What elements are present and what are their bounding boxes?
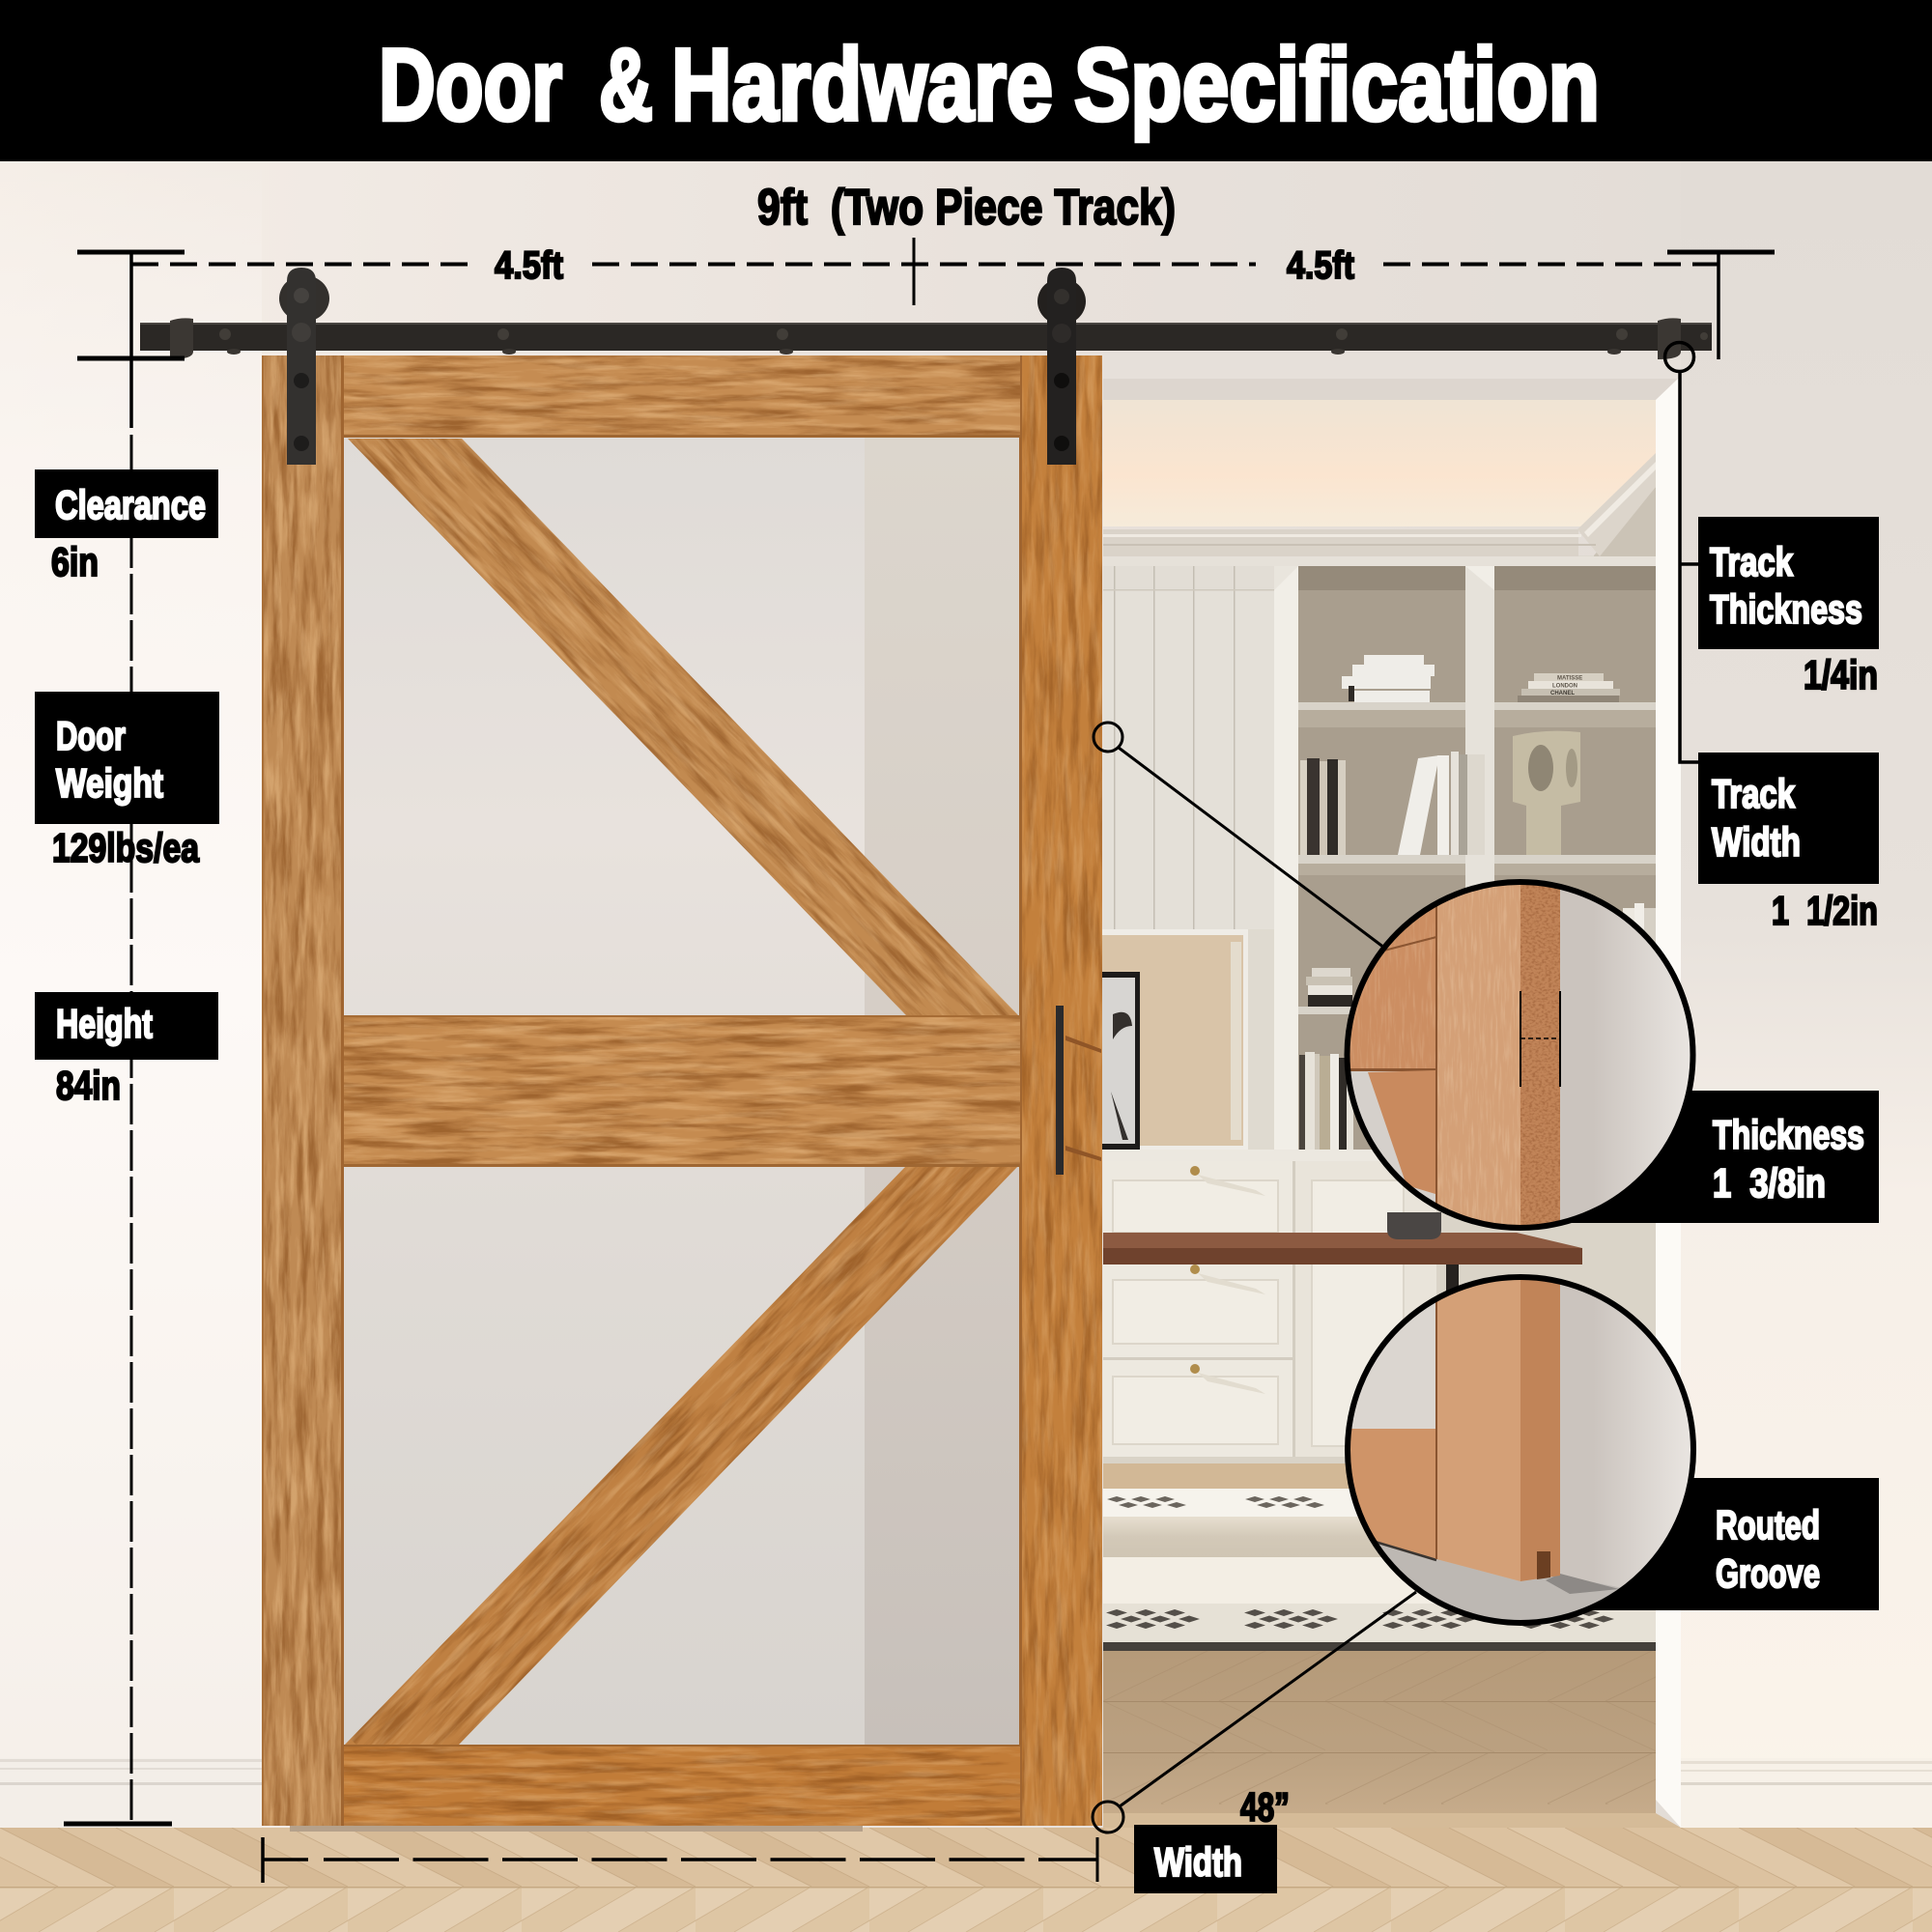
counter and cabinets: [1103, 1150, 1656, 1463]
label: right half track: 4.5ft: [1287, 244, 1354, 287]
spec: door width: 48”: [1240, 1784, 1290, 1830]
top brace: [348, 439, 1018, 1015]
spec: height: 84in: [56, 1063, 121, 1108]
brace detail: [1368, 1070, 1435, 1194]
rear floor and rug: [1103, 1457, 1681, 1828]
spec: clearance: Clearance: [55, 482, 206, 527]
label: left half track: 4.5ft: [495, 244, 563, 287]
dimension: clearance and height line: [64, 252, 185, 1824]
spec: track width: [1698, 753, 1879, 933]
stile face: [1436, 869, 1520, 1236]
spec: routed groove: [1546, 1478, 1879, 1610]
floor detail: [1379, 1545, 1620, 1620]
spec: door width: [1134, 1784, 1290, 1893]
spec: door thickness: Thickness: [1713, 1112, 1864, 1157]
title bar: &: [599, 28, 653, 142]
track bolts: [219, 328, 1708, 340]
books row two: [1300, 752, 1485, 855]
barn door: [262, 355, 1102, 1832]
book stack: white: [1342, 655, 1435, 702]
heading: track length: 9ft (Two Piece Track): [757, 180, 1176, 236]
wainscot panelling: [1103, 566, 1277, 1151]
door jamb: [1656, 379, 1681, 1828]
back wall: [1103, 555, 1656, 1174]
spec: door weight: [35, 692, 219, 870]
stile side: [1520, 869, 1560, 1236]
book stack: titled: [1518, 673, 1620, 702]
sculpture: [1513, 731, 1580, 855]
callout: door bottom leader: [1093, 1592, 1416, 1833]
spec: door thickness: 1 3/8in: [1713, 1160, 1826, 1206]
book stack: titled: CHANEL: [1550, 691, 1575, 696]
spec: door thickness: [1546, 1091, 1879, 1223]
left hanger: [279, 268, 329, 465]
callout: door edge leader: [1094, 723, 1384, 948]
table: [1103, 1212, 1582, 1303]
spec: track thickness: [1698, 517, 1879, 697]
rail detail: [1350, 907, 1435, 1068]
spec: door width: Width: [1154, 1839, 1242, 1885]
spec: door weight: Weight: [56, 760, 163, 806]
top rail: [344, 355, 1020, 438]
spec: routed groove: Routed: [1716, 1502, 1820, 1548]
magnifier: door thickness detail: [1343, 869, 1700, 1236]
left stile: [262, 355, 344, 1826]
baseboards: [0, 1758, 1932, 1828]
door shadow on floor: [290, 1826, 863, 1832]
magnifier: routed groove detail: [1343, 1273, 1700, 1633]
book stack: titled: MATISSE: [1557, 676, 1582, 682]
right stile: [1019, 355, 1102, 1826]
door handle: [1056, 1006, 1101, 1175]
shelf cells: [1298, 566, 1656, 1150]
spec: track width: Track: [1712, 771, 1795, 816]
ceiling: [1103, 400, 1656, 526]
spec: clearance: 6in: [51, 539, 99, 584]
floor: [0, 1828, 1932, 1932]
crown moulding: [1103, 453, 1656, 570]
spec: track thickness: 1/4in: [1804, 652, 1878, 697]
spec: track width: 1 1/2in: [1772, 888, 1878, 933]
framed art: [1102, 929, 1248, 1150]
spec: height: [35, 992, 218, 1108]
spec: door weight: Door: [56, 713, 126, 758]
spec: door weight: 129lbs/ea: [52, 825, 200, 870]
track stops: [170, 318, 1681, 359]
bottom rail: [344, 1745, 1020, 1826]
spec: track thickness: Thickness: [1710, 586, 1862, 632]
spec: routed groove: Groove: [1716, 1550, 1820, 1596]
barn door track: [140, 318, 1712, 359]
spec: height: Height: [56, 1001, 153, 1046]
spec: clearance: [35, 469, 218, 584]
rail detail: [1343, 1429, 1436, 1559]
dimension: door width line: [263, 1837, 1097, 1883]
title bar: Door: [379, 28, 562, 142]
soffit: [1103, 379, 1678, 400]
lower brace: [345, 1167, 1017, 1745]
stile side: [1520, 1273, 1560, 1581]
dimension: total track length: [131, 238, 1775, 359]
stile face: [1436, 1273, 1520, 1581]
title bar: Specification: [1074, 28, 1600, 142]
title bar: Hardware: [671, 28, 1053, 142]
books row four: [1299, 1052, 1353, 1150]
books row three: [1306, 903, 1656, 1007]
groove: [1537, 1551, 1550, 1579]
title bar: [0, 0, 1932, 161]
right hanger: [1037, 268, 1086, 465]
bookshelf: [1274, 566, 1656, 1155]
glass panels: [343, 437, 1020, 1745]
spec: track thickness: Track: [1710, 539, 1793, 584]
room seen through the doorway: [1102, 379, 1681, 1828]
middle rail: [344, 1015, 1020, 1167]
book stack: titled: LONDON: [1552, 684, 1577, 690]
thickness marker: [1520, 991, 1560, 1087]
callout: track end leader lines: [1665, 342, 1698, 762]
spec: track width: Width: [1712, 819, 1801, 865]
